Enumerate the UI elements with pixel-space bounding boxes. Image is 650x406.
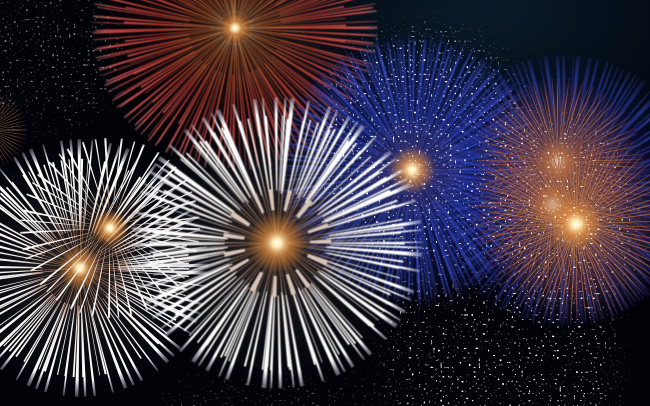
burst: red firework top centre	[85, 0, 385, 178]
burst: white firework left	[0, 138, 210, 398]
burst: faint orange firework left edge	[0, 88, 30, 172]
burst: large white firework centre	[127, 93, 427, 393]
orange shell middle	[463, 115, 643, 295]
burst: white firework left secondary	[10, 128, 210, 328]
orange shell lower	[471, 119, 650, 329]
burst: orange firework cluster	[463, 72, 650, 329]
orange shell upper	[468, 72, 648, 252]
burst: central blue firework	[270, 28, 554, 312]
burst: right blue firework outer	[423, 48, 650, 332]
